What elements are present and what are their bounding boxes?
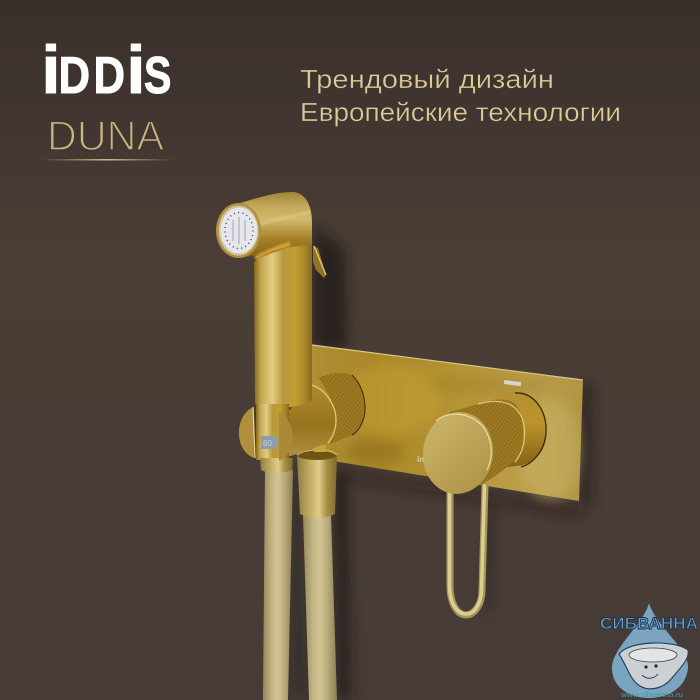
left hose xyxy=(263,470,293,700)
headline text: Европейские технологии xyxy=(300,97,621,127)
holder label xyxy=(261,436,278,449)
wall shadows xyxy=(290,225,592,700)
shower nozzle rim xyxy=(216,203,261,258)
logo: IDDIS xyxy=(42,32,171,108)
shower nozzle face xyxy=(220,208,258,254)
logo: IDDIS: i xyxy=(126,32,145,108)
wall holder bracket: 60 xyxy=(263,439,272,448)
right hose xyxy=(303,515,337,700)
shower handle xyxy=(254,240,312,408)
watermark tub xyxy=(619,643,688,689)
wall holder bracket xyxy=(239,404,293,473)
logo: IDDIS: D xyxy=(94,48,125,105)
holder front half disc xyxy=(279,412,293,461)
headline text xyxy=(300,64,621,127)
knob back cylinder xyxy=(490,392,546,470)
holder sleeve xyxy=(256,404,289,460)
shower lever trigger xyxy=(313,246,326,278)
watermark url: www.sibvanna.ru xyxy=(620,692,683,699)
logo: IDDIS: D xyxy=(58,48,90,105)
wall plate xyxy=(305,344,583,501)
plate small logo: in xyxy=(417,455,424,464)
shower head xyxy=(240,192,312,258)
watermark drop xyxy=(612,603,688,698)
watermark wordmark: СИБВАННА xyxy=(600,614,698,633)
logo underline xyxy=(40,159,175,160)
loop lever xyxy=(450,486,485,615)
series name: DUNA: DUNA xyxy=(47,112,164,159)
logo: IDDIS: i xyxy=(42,32,60,108)
hand shower body xyxy=(216,192,326,408)
watermark: sibvanna xyxy=(600,603,698,699)
plate indicator mark xyxy=(504,380,521,386)
logo: IDDIS: S xyxy=(144,46,171,104)
holder arm and knurled cylinder xyxy=(285,373,365,458)
hose connector xyxy=(297,445,337,518)
knurled section xyxy=(450,399,523,490)
mixer knob xyxy=(418,392,546,498)
knob front disc xyxy=(418,408,498,498)
holder rear half disc xyxy=(239,407,254,458)
headline text: Трендовый дизайн xyxy=(300,64,554,94)
